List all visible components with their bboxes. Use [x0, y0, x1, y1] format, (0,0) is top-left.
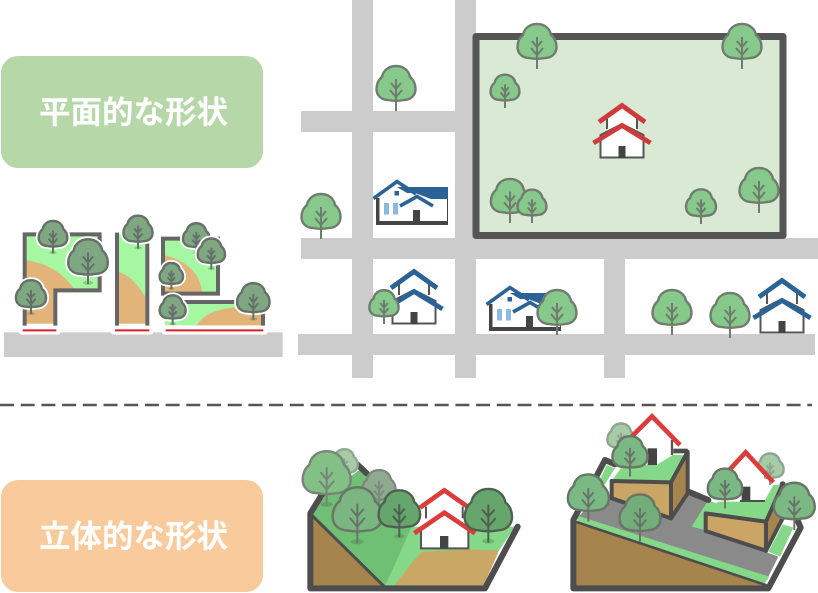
ground: upper left green	[599, 465, 615, 487]
panel: sloped terrain scene	[303, 449, 518, 588]
heading: 立体的な形状: 立体的な形状	[39, 518, 228, 554]
ground: right green lot	[768, 524, 793, 557]
divider: dashed line	[0, 404, 812, 406]
lot: wide lower parcel	[165, 302, 263, 326]
heading: 平面的な形状: 平面的な形状	[39, 94, 228, 130]
slope edge	[312, 516, 384, 587]
frontage: red road-contact lines	[19, 326, 268, 335]
outline	[573, 460, 801, 588]
road	[4, 332, 283, 357]
panel: plan view lots with road frontage	[4, 216, 283, 357]
block: lower retaining block	[706, 484, 783, 551]
faded trees behind houses	[607, 423, 784, 485]
ground: tan cut	[393, 549, 499, 587]
ground: green verge strip	[577, 516, 769, 584]
trees on map	[302, 24, 778, 338]
panel: 平面的な形状 label	[1, 56, 263, 168]
icon: red house in park	[594, 106, 650, 158]
panel: stepped terrain scene	[568, 416, 815, 588]
ground: brown slope side	[574, 522, 767, 587]
ground: slope side	[312, 515, 383, 587]
ground: green under block 2	[692, 500, 720, 530]
ground: dark green slope	[312, 468, 412, 587]
lot: narrow flag-shaped	[117, 233, 147, 326]
ground: light green	[385, 527, 515, 587]
icon: tree right of house	[465, 489, 512, 544]
block: upper retaining block	[612, 451, 688, 518]
panel: street map	[298, 0, 818, 378]
icon: blue two-storey house right	[754, 280, 810, 333]
trees on lots	[16, 216, 270, 325]
icon: upper red house	[628, 416, 680, 467]
icon: blue two-storey house	[386, 272, 442, 324]
lot: square upper parcel	[163, 239, 218, 294]
outline	[310, 462, 518, 588]
trees on slope	[303, 449, 420, 544]
lot: L-shaped	[25, 234, 100, 326]
icon: lower red house	[728, 452, 773, 501]
park: large parcel	[476, 36, 783, 236]
trees on stepped terrain	[568, 436, 815, 542]
slope edge	[573, 521, 767, 585]
panel: 立体的な形状 label	[1, 480, 263, 592]
icon: red-roof house	[414, 490, 475, 548]
icon: blue house row 2	[374, 181, 448, 225]
icon: blue house row 3	[486, 287, 561, 331]
roads	[298, 0, 818, 378]
ground: gray road	[578, 493, 778, 577]
